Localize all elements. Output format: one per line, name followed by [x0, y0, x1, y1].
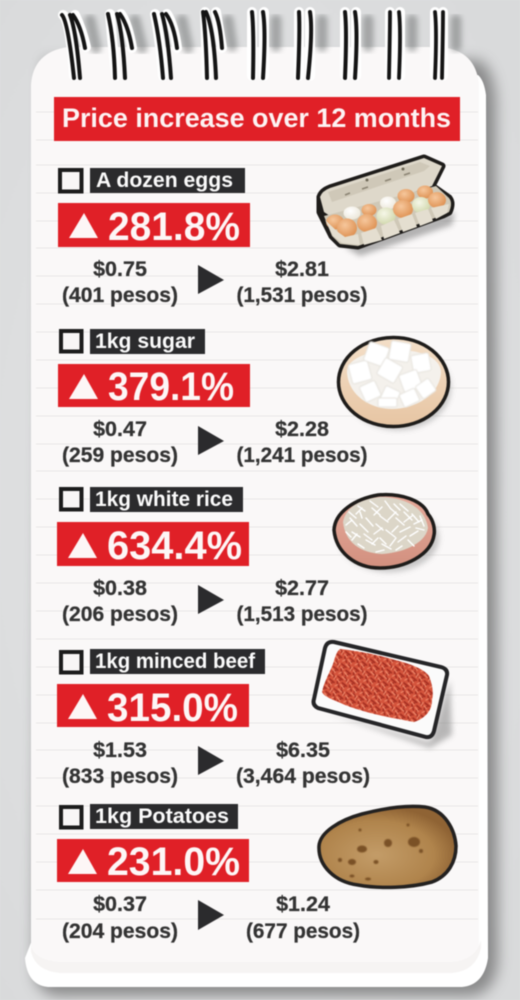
percent badge: 315.0% — [107, 686, 238, 730]
notebook front page — [31, 47, 479, 962]
item: rice: (1,513 pesos) — [236, 602, 368, 626]
icon: rice bowl — [334, 495, 439, 572]
icon: potato — [319, 806, 456, 887]
percent badge: 634.4% — [107, 524, 242, 568]
percent badge — [57, 839, 249, 884]
eggs — [326, 214, 344, 230]
item: minced beef — [57, 642, 452, 788]
percent badge: 231.0% — [107, 840, 240, 884]
new price: $2.81 — [275, 257, 329, 281]
item: sugar: (1,241 pesos) — [236, 443, 368, 467]
item: rice — [57, 487, 439, 626]
percent badge: 281.8% — [108, 205, 240, 249]
ring 2 — [110, 14, 132, 76]
item: eggs — [58, 158, 455, 307]
notebook bottom page edges — [31, 940, 481, 973]
arrow — [198, 900, 224, 930]
old price: $0.37 — [93, 892, 147, 916]
carton front cups — [325, 220, 360, 245]
title — [54, 97, 460, 141]
label: 1kg white rice — [95, 487, 233, 511]
item: potatoes — [57, 804, 456, 943]
label: 1kg sugar — [95, 329, 196, 353]
ring 4 — [205, 12, 222, 76]
item: potatoes: (204 pesos) — [62, 919, 178, 943]
new price: $6.35 — [276, 738, 330, 762]
percent badge — [57, 522, 249, 568]
percent badge — [58, 364, 250, 409]
item: sugar: (259 pesos) — [62, 443, 178, 467]
label: 1kg Potatoes — [95, 804, 229, 828]
arrow — [198, 426, 224, 455]
item: eggs: (401 pesos) — [62, 283, 178, 307]
carton tray — [324, 186, 451, 246]
label: 1kg minced beef — [95, 649, 256, 673]
old price: $0.47 — [93, 417, 147, 441]
item: minced beef: (833 pesos) — [62, 764, 178, 788]
old price: $0.38 — [93, 576, 147, 600]
title: Price increase over 12 months — [62, 103, 451, 133]
new price: $1.24 — [276, 892, 330, 916]
percent badge — [57, 684, 249, 730]
icon: meat tray — [314, 642, 452, 748]
ruled lines — [36, 112, 478, 919]
percent badge: 379.1% — [108, 365, 234, 409]
new price: $2.28 — [275, 417, 329, 441]
ring 7 — [345, 12, 356, 76]
item: potatoes: (677 pesos) — [246, 919, 360, 943]
arrow — [198, 585, 224, 614]
item: minced beef: (3,464 pesos) — [236, 764, 370, 788]
ring 9 — [435, 12, 443, 76]
ring 1 — [63, 15, 86, 76]
ring 8 — [390, 12, 400, 76]
icon: egg carton — [320, 158, 455, 256]
label: A dozen eggs — [96, 168, 233, 192]
item: sugar — [58, 329, 451, 467]
item: rice: (206 pesos) — [62, 602, 178, 626]
percent badge — [58, 203, 250, 249]
ring 3 — [155, 14, 177, 76]
arrow — [198, 265, 224, 294]
ring 6 — [299, 12, 310, 76]
arrow — [198, 746, 224, 775]
new price: $2.77 — [275, 576, 329, 600]
checkbox — [60, 170, 82, 192]
item: eggs: (1,531 pesos) — [236, 283, 368, 307]
icon: sugar bowl — [338, 338, 451, 430]
old price: $0.75 — [93, 257, 147, 281]
old price: $1.53 — [93, 738, 147, 762]
ring 5 — [252, 12, 264, 76]
spiral binding — [62, 12, 456, 78]
